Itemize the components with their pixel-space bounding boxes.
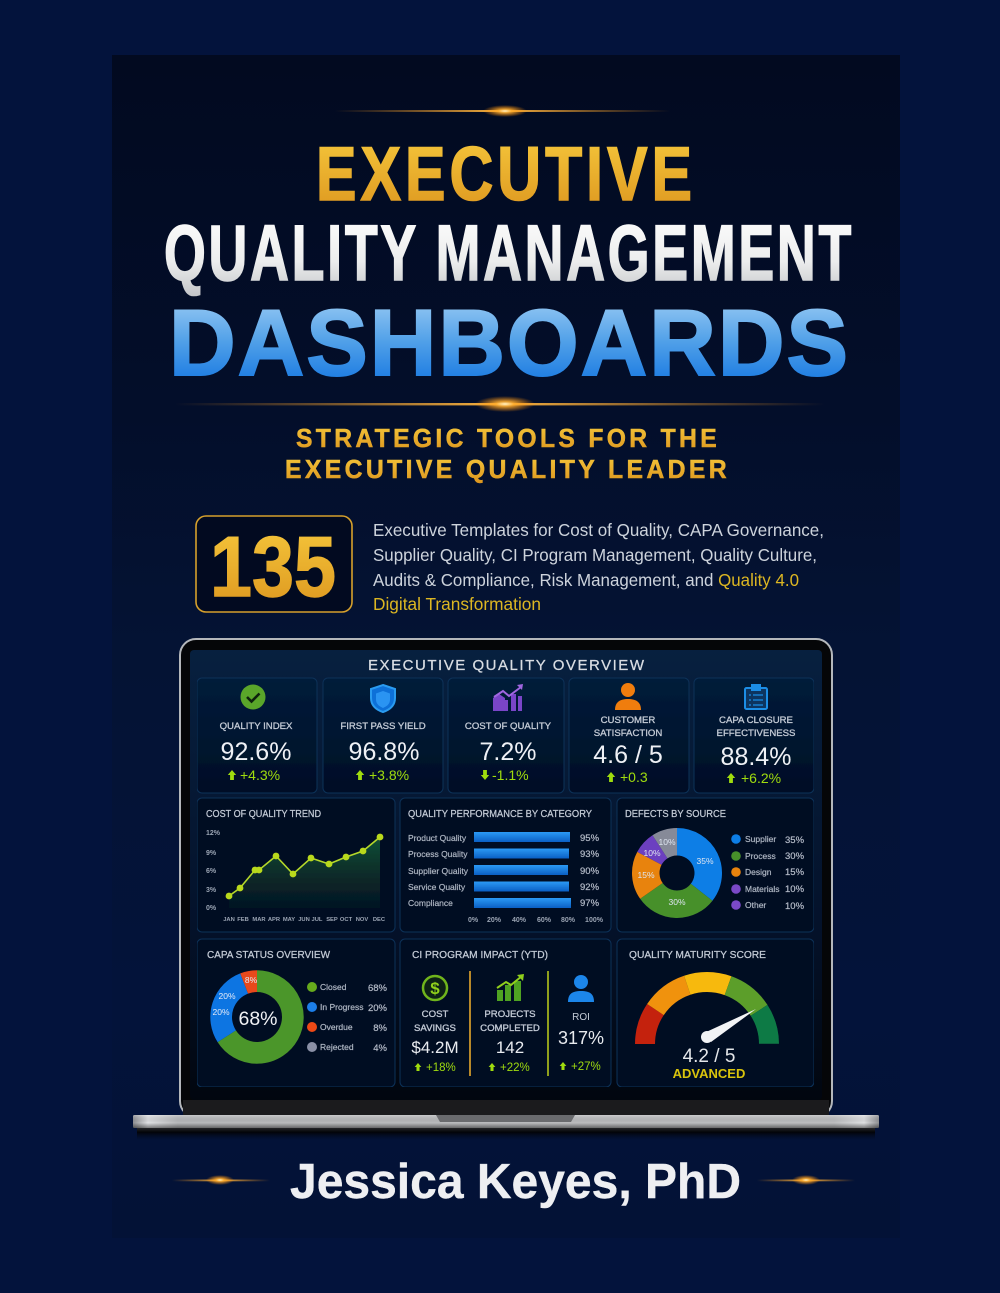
icon: purple chart (493, 684, 523, 711)
description text: Supplier Quality, CI Program Management, Quality Culture, (373, 545, 817, 565)
legend: 35% (785, 835, 805, 846)
legend: Supplier (745, 834, 776, 844)
kpi card: cost of quality: 7.2% (480, 738, 536, 766)
legend: 15% (785, 867, 805, 878)
donut chart: 8% (245, 975, 258, 985)
bar labels: Service Quality (408, 882, 466, 892)
kpi card: quality index: 92.6% (221, 738, 291, 766)
laptop base (133, 1115, 879, 1128)
x axis labels: SEP (326, 917, 338, 923)
metric: roi: ROI (572, 1012, 590, 1023)
icon: check badge (240, 684, 266, 710)
laptop screen (190, 650, 822, 1100)
change: down: -1.1% (492, 767, 529, 783)
description text: Digital Transformation (373, 594, 541, 614)
kpi card: cost of quality: COST OF QUALITY (465, 721, 552, 732)
legend: 30% (785, 851, 805, 862)
kpi card: capa closure effectiveness: 88.4% (721, 743, 791, 771)
y axis labels: 0% (206, 905, 217, 912)
metric: roi: +27% (571, 1061, 601, 1073)
icon: orange person (615, 683, 641, 710)
inner cover panel (112, 55, 900, 1238)
donut chart (637, 837, 714, 907)
description text (373, 520, 824, 614)
panel: ci program impact: CI PROGRAM IMPACT (YTD) (412, 949, 548, 961)
laptop (133, 639, 879, 1140)
legend: 4% (373, 1043, 388, 1054)
kpi card: customer satisfaction: 4.6 / 5 (593, 741, 663, 769)
kpi card: quality index (197, 678, 317, 793)
x axis labels: 0% (468, 917, 479, 924)
panel: ci program impact (400, 939, 611, 1087)
kpi card: quality index: QUALITY INDEX (220, 721, 293, 732)
middle decorative flare (175, 396, 825, 412)
dividers (469, 971, 549, 1076)
x axis labels: 100% (585, 917, 604, 924)
bar labels (408, 833, 469, 908)
kpi card: first pass yield (323, 678, 443, 793)
x axis labels: 40% (512, 917, 527, 924)
kpi card: customer satisfaction (569, 678, 689, 793)
metric: cost savings: SAVINGS (414, 1023, 456, 1034)
score: 4.2 / 5 (683, 1046, 735, 1067)
panel: quality maturity score: QUALITY MATURITY SCORE (629, 949, 766, 961)
subtitle: STRATEGIC TOOLS FOR THE (296, 423, 720, 453)
y axis labels: 12% (206, 830, 221, 837)
legend (731, 834, 805, 912)
needle (701, 1009, 756, 1043)
metric: projects completed: PROJECTS (484, 1009, 536, 1020)
author name: Jessica Keyes, PhD (290, 1155, 741, 1209)
x axis labels: MAR (252, 917, 266, 923)
author flare left (172, 1175, 270, 1185)
bar labels: Product Quality (408, 833, 467, 843)
x axis labels: JUN (298, 917, 310, 923)
x axis labels: APR (268, 917, 281, 923)
author flare right (757, 1175, 855, 1185)
panel: quality performance by category (400, 798, 611, 932)
panel: defects by source (617, 798, 814, 932)
legend: 10% (785, 901, 805, 912)
title (164, 132, 854, 395)
legend: 8% (373, 1023, 388, 1034)
y axis labels: 9% (206, 850, 217, 857)
x axis labels: FEB (237, 917, 249, 923)
bar labels: Process Quality (408, 849, 468, 859)
icon: shield (371, 685, 395, 712)
bar values (580, 833, 600, 909)
description text: Executive Templates for Cost of Quality, CAPA Governance, (373, 520, 824, 540)
kpi card: capa closure effectiveness: CAPA CLOSURE (719, 715, 793, 726)
panel: defects by source: DEFECTS BY SOURCE (625, 808, 726, 820)
bar values: 92% (580, 882, 600, 893)
title line: executive: EXECUTIVE (316, 132, 696, 217)
legend: Process (745, 851, 776, 861)
donut chart: 20% (212, 1007, 230, 1017)
metric: cost savings: COST (422, 1009, 448, 1020)
x axis labels (223, 917, 386, 923)
legend: Design (745, 867, 772, 877)
subtitle (285, 423, 730, 484)
legend: Closed (320, 982, 347, 992)
icon: clipboard (745, 685, 767, 709)
y axis labels: 6% (206, 868, 217, 875)
legend: In Progress (320, 1002, 363, 1012)
rating: ADVANCED (673, 1066, 745, 1081)
subtitle: EXECUTIVE QUALITY LEADER (285, 454, 730, 484)
donut chart: 10% (643, 848, 661, 858)
kpi card: customer satisfaction: CUSTOMER (601, 715, 655, 726)
legend (307, 982, 388, 1054)
panel: capa status overview: CAPA STATUS OVERVIEW (207, 949, 330, 961)
change: up: +3.8% (369, 767, 409, 783)
top decorative flare (335, 105, 670, 117)
metric: projects completed: +22% (500, 1062, 530, 1074)
donut chart: 30% (668, 897, 686, 907)
dashboard contents (197, 657, 814, 1087)
x axis labels: NOV (356, 917, 368, 923)
metric: projects completed: 142 (496, 1038, 524, 1057)
legend: 68% (368, 983, 388, 994)
kpi card: first pass yield: FIRST PASS YIELD (340, 721, 426, 732)
donut chart: 20% (218, 991, 236, 1001)
bar values: 95% (580, 833, 600, 844)
icon: dollar coin: $ (430, 979, 440, 998)
donut chart: 15% (637, 870, 655, 880)
title line: dashboards: DASHBOARDS (169, 290, 850, 395)
kpi card: first pass yield: 96.8% (349, 738, 419, 766)
y axis labels (206, 830, 221, 912)
change: up: +6.2% (741, 770, 781, 786)
bars (474, 832, 571, 908)
description text: Audits & Compliance, Risk Management, and Quality 4.0 (373, 570, 799, 590)
legend: Overdue (320, 1022, 353, 1032)
x axis labels: 20% (487, 917, 502, 924)
bar values: 97% (580, 898, 600, 909)
metric: projects completed (480, 974, 540, 1074)
panel: cost of quality trend (197, 798, 395, 932)
kpi card: customer satisfaction: SATISFACTION (594, 728, 662, 739)
line chart (226, 834, 383, 908)
panel: quality performance by category: QUALITY PERFORMANCE BY CATEGORY (408, 808, 592, 820)
icon: green chart (497, 974, 524, 1001)
x axis labels: DEC (373, 917, 386, 923)
laptop shadow (137, 1127, 875, 1140)
metric: roi (558, 975, 604, 1073)
donut chart: 68% (238, 1008, 278, 1030)
gauge (645, 982, 769, 1044)
panel: quality maturity score (617, 939, 814, 1087)
donut chart: 10% (658, 837, 676, 847)
y axis labels: 3% (206, 887, 217, 894)
x axis labels: MAY (283, 917, 295, 923)
metric: cost savings (411, 976, 459, 1074)
legend: Materials (745, 884, 779, 894)
bar values: 90% (580, 866, 600, 877)
panel: capa status overview (197, 939, 395, 1087)
bar values: 93% (580, 849, 600, 860)
metric: roi: 317% (558, 1028, 604, 1048)
metric: cost savings: +18% (426, 1062, 456, 1074)
laptop lid (180, 639, 832, 1117)
laptop notch (436, 1115, 575, 1122)
x axis labels: JUL (312, 917, 323, 923)
x axis labels (468, 917, 604, 924)
badge: 135 templates: 135 (210, 520, 336, 615)
metric: cost savings: $4.2M (411, 1038, 459, 1057)
metric: projects completed: COMPLETED (480, 1023, 540, 1034)
icon: blue person (568, 975, 594, 1002)
donut chart: 35% (696, 856, 714, 866)
x axis labels: OCT (340, 917, 353, 923)
bar labels: Compliance (408, 898, 453, 908)
kpi card: capa closure effectiveness: EFFECTIVENESS (717, 728, 795, 739)
donut chart (212, 975, 293, 1053)
x axis labels: JAN (223, 917, 235, 923)
legend: 10% (785, 884, 805, 895)
kpi card: cost of quality (448, 678, 564, 793)
x axis labels: 60% (537, 917, 552, 924)
legend: 20% (368, 1003, 388, 1014)
legend: Rejected (320, 1042, 354, 1052)
legend: Other (745, 900, 766, 910)
dashboard title: EXECUTIVE QUALITY OVERVIEW (368, 657, 645, 674)
bar labels: Supplier Quality (408, 866, 469, 876)
change: up: +0.3 (620, 769, 648, 785)
change: up: +4.3% (240, 767, 280, 783)
panel: cost of quality trend: COST OF QUALITY TREND (206, 808, 321, 820)
x axis labels: 80% (561, 917, 576, 924)
kpi card: capa closure effectiveness (694, 678, 814, 793)
laptop chin (183, 1100, 829, 1116)
